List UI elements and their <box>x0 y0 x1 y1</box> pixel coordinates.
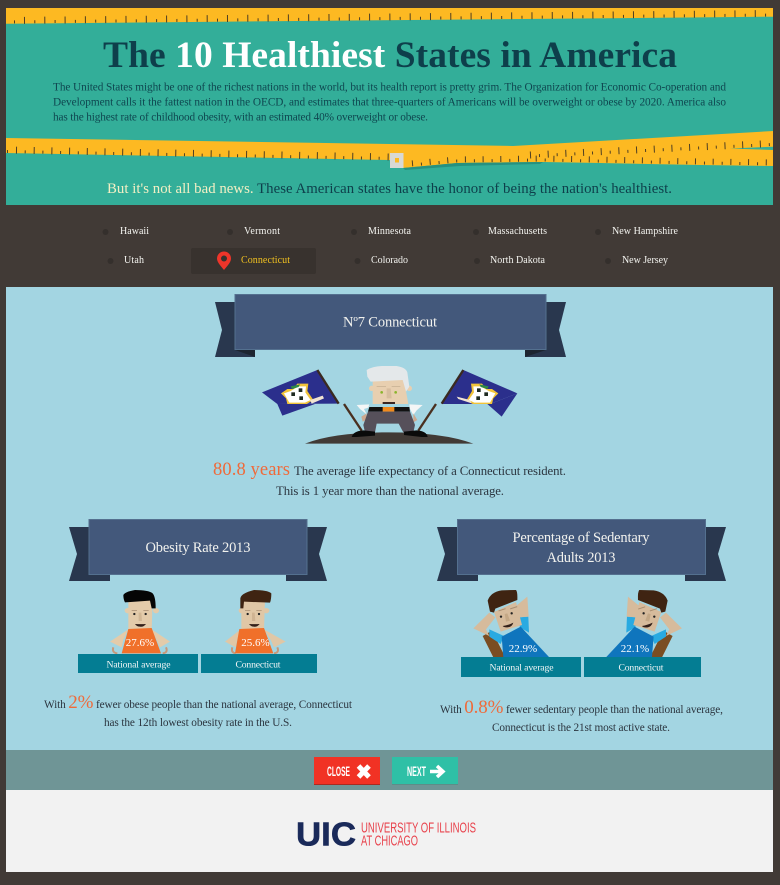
panel: state navigation: Hawaii <box>120 226 149 237</box>
banner: Obesity Rate 2013 <box>69 520 327 581</box>
sedentary caption: Connecticut is the 21st most active state. <box>492 722 670 734</box>
subtitle: But it's not all bad news. These American states have the honor of being the nation's healthiest. <box>107 181 672 197</box>
intro text: The United States might be one of the richest nations in the world, but its health report is pretty grim. The Organization for Economic Co-operation and <box>53 82 726 94</box>
intro text: Development calls it the fattest nation in the OECD, and estimates that three-quarters of Americans will be overweight or obese by 2020. America also <box>53 96 726 108</box>
sedentary caption <box>440 697 723 734</box>
button: next <box>392 757 458 785</box>
life expectancy text: The average life expectancy of a Connecticut resident. <box>294 464 566 478</box>
button: close <box>314 757 380 785</box>
panel: state navigation: Minnesota <box>368 226 412 237</box>
banner: No7 Connecticut: Nº7 Connecticut <box>343 314 437 330</box>
obesity caption: With 2% fewer obese people than the national average, Connecticut <box>44 692 353 713</box>
label: Connecticut: Connecticut <box>236 660 281 670</box>
left flag <box>262 370 362 431</box>
obesity caption: has the 12th lowest obesity rate in the U.S. <box>104 717 292 729</box>
life expectancy text: 80.8 years <box>213 460 290 480</box>
value: 25.6%: 25.6% <box>241 637 270 649</box>
value: 22.9%: 22.9% <box>509 643 537 655</box>
footer: UIC logo: UIC <box>296 816 356 852</box>
label: national average: National average <box>106 660 170 670</box>
mound <box>305 432 473 444</box>
footer: UIC logo <box>6 790 773 872</box>
panel: state navigation: Connecticut <box>241 255 290 266</box>
label: national average <box>78 654 198 673</box>
banner: Obesity Rate 2013: Obesity Rate 2013 <box>146 540 250 556</box>
panel: state navigation: New Hampshire <box>612 226 679 237</box>
button bar <box>6 750 773 790</box>
intro text <box>53 82 726 124</box>
chart: obesity Connecticut <box>225 590 286 653</box>
panel: state navigation: Colorado <box>371 255 408 266</box>
measuring tape: top <box>6 8 773 24</box>
panel: Connecticut detail <box>6 287 773 750</box>
footer: UIC logo: UNIVERSITY OF ILLINOIS <box>361 820 476 836</box>
chart: sedentary Connecticut <box>606 590 682 657</box>
panel: state navigation <box>102 226 679 274</box>
button: close: CLOSE <box>327 763 350 779</box>
button: next: NEXT <box>407 763 426 779</box>
obesity caption <box>44 692 353 729</box>
banner: Percentage of Sedentary Adults 2013 <box>437 520 726 581</box>
panel: state navigation: Massachusetts <box>488 226 547 237</box>
man <box>352 366 428 437</box>
panel: state navigation: North Dakota <box>490 255 546 266</box>
chart: sedentary national average <box>473 590 549 657</box>
label: Connecticut: Connecticut <box>618 662 664 674</box>
footer: UIC logo: AT CHICAGO <box>361 834 418 850</box>
value: 22.1%: 22.1% <box>621 643 649 655</box>
value: 27.6%: 27.6% <box>126 637 154 649</box>
banner: Percentage of Sedentary Adults 2013: Adults 2013 <box>546 550 616 566</box>
measuring tape: torn middle <box>6 131 773 170</box>
right flag <box>418 370 517 431</box>
icon: governor with two flags <box>262 366 517 444</box>
panel: state navigation: Vermont <box>244 226 280 237</box>
life expectancy text: This is 1 year more than the national average. <box>276 484 504 498</box>
banner: Percentage of Sedentary Adults 2013: Percentage of Sedentary <box>512 530 650 546</box>
banner: No7 Connecticut <box>215 294 566 357</box>
sedentary caption: With 0.8% fewer sedentary people than the national average, <box>440 697 723 718</box>
intro text: has the highest rate of childhood obesity, with an estimated 40% overweight or obese. <box>53 112 428 124</box>
life expectancy text <box>213 460 566 498</box>
chart: obesity national average <box>110 590 170 653</box>
panel: header <box>6 8 773 205</box>
label: national average <box>461 657 581 677</box>
label: Connecticut <box>201 654 317 673</box>
label: Connecticut <box>584 657 701 677</box>
panel: state navigation: Utah <box>124 255 144 266</box>
title: The 10 Healthiest States in America <box>103 35 677 76</box>
label: national average: National average <box>490 662 554 674</box>
panel: state navigation: New Jersey <box>622 255 668 266</box>
